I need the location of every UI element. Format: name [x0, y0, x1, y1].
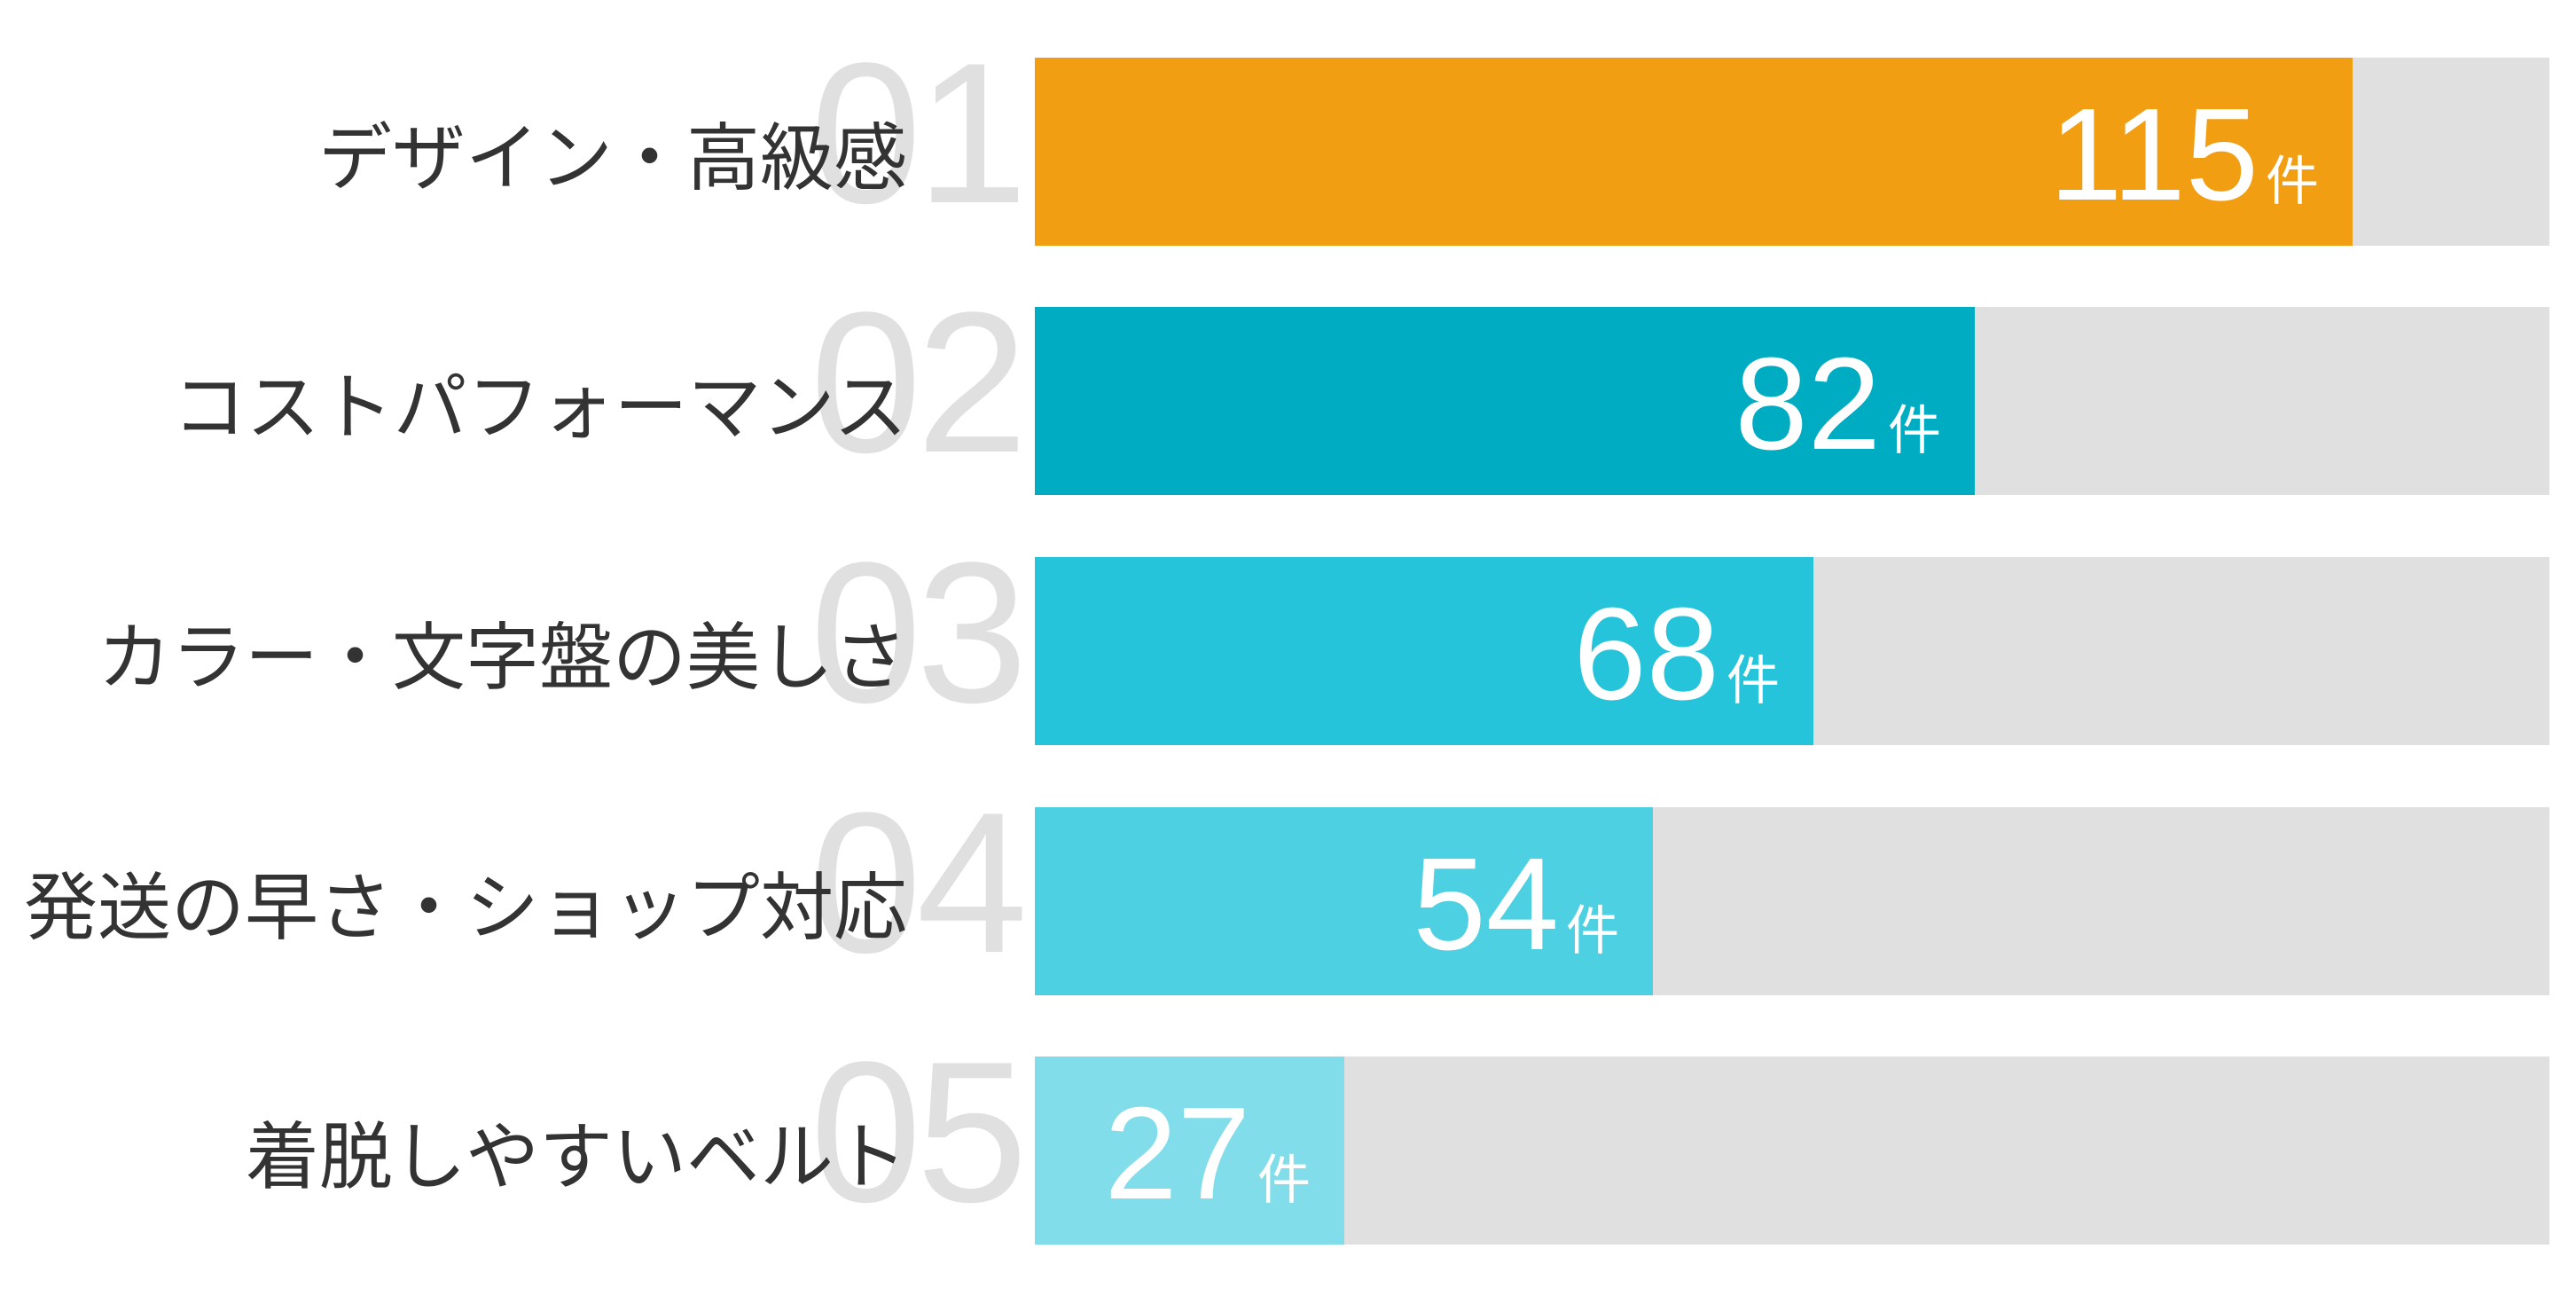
- row 5: [246, 1019, 2549, 1245]
- bar 82: [1035, 307, 1975, 495]
- rank 04: 04: [810, 770, 1022, 994]
- label: デザイン・高級感: [318, 117, 907, 200]
- value: 115件: [2049, 82, 2319, 228]
- label: 発送の早さ・ショップ対応: [24, 867, 907, 949]
- rank 02: 02: [810, 270, 1022, 494]
- bar 115: [1035, 58, 2353, 246]
- label: 着脱しやすいベルト: [246, 1116, 907, 1198]
- label: コストパフォーマンス: [173, 366, 907, 449]
- rank 03: 03: [810, 520, 1022, 744]
- track: [1035, 58, 2549, 246]
- rank 01: 01: [810, 20, 1022, 245]
- bar 27: [1035, 1057, 1344, 1245]
- label: カラー・文字盤の美しさ: [98, 617, 907, 699]
- value: 82件: [1734, 331, 1941, 477]
- row 1: [318, 20, 2549, 246]
- row 3: [98, 520, 2549, 745]
- bar 68: [1035, 557, 1813, 745]
- rank 05: 05: [810, 1019, 1022, 1244]
- value: 54件: [1413, 831, 1619, 978]
- value: 68件: [1573, 581, 1780, 727]
- value: 27件: [1104, 1080, 1311, 1227]
- track: [1035, 807, 2549, 995]
- row 4: [24, 770, 2549, 995]
- row 2: [173, 270, 2549, 495]
- bar 54: [1035, 807, 1653, 995]
- track: [1035, 1057, 2549, 1245]
- track: [1035, 557, 2549, 745]
- track: [1035, 307, 2549, 495]
